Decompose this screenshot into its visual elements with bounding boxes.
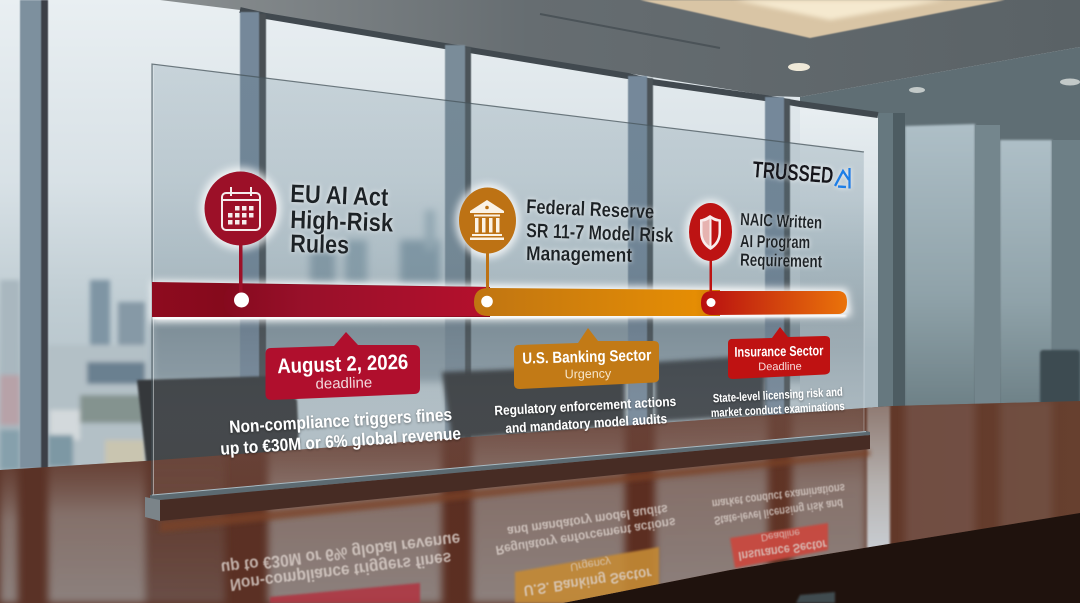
reflected text: Urgency — [569, 555, 612, 573]
description: licensing: market conduct examinations — [711, 399, 845, 420]
heading: EU AI Act High-Risk Rules: Rules — [290, 230, 350, 260]
badge: August 2, 2026 deadline — [266, 332, 420, 400]
heading: Federal Reserve SR 11-7: SR 11-7 Model Risk — [526, 220, 674, 247]
reflected text: State-level licensing risk and — [713, 496, 844, 528]
reflected badges — [270, 523, 828, 603]
badge: August 2, 2026 deadline: deadline — [315, 374, 372, 393]
badge: Insurance Sector Deadline: Insurance Sector — [734, 342, 824, 360]
heading: EU AI Act High-Risk Rules: EU AI Act — [290, 180, 389, 212]
milestone: NAIC — [686, 200, 845, 420]
icon: bank — [456, 184, 520, 290]
description: enforcement — [494, 394, 677, 436]
heading: EU AI Act High-Risk Rules — [290, 180, 394, 260]
boardroom table with reflections — [0, 395, 1080, 603]
description: licensing — [711, 385, 845, 420]
under-table shadow — [540, 505, 1080, 603]
logo: TRUSSED AI: TRUSSED — [752, 156, 834, 188]
city skyline outside the windows — [0, 210, 900, 470]
reflected text: Insurance Sector — [738, 537, 828, 564]
heading: Federal Reserve SR 11-7: Management — [526, 243, 633, 267]
description: enforcement: Regulatory enforcement actions — [494, 394, 677, 418]
heading: Federal Reserve SR 11-7 — [526, 196, 674, 267]
reflected text: U.S. Banking Sector — [523, 564, 653, 599]
badge: August 2, 2026 deadline: August 2, 2026 — [277, 351, 409, 378]
reflected text: and mandatory model audits — [506, 502, 669, 539]
glass panel — [145, 64, 870, 521]
description: fines: up to €30M or 6% global revenue — [220, 423, 462, 459]
heading: NAIC Written AI Program Requirement: AI Program — [740, 231, 810, 252]
description: enforcement: and mandatory model audits — [505, 411, 668, 436]
reflected text: up to €30M or 6% global revenue — [220, 529, 461, 578]
reflected text: Regulatory enforcement actions — [495, 515, 677, 558]
reflected text: market conduct examinations — [711, 481, 846, 511]
bright reflection under the panel base — [160, 450, 870, 532]
reflected text — [220, 481, 846, 599]
icon: calendar — [200, 168, 280, 296]
timeline bar — [152, 281, 851, 321]
heading: Federal Reserve SR 11-7: Federal Reserve — [526, 196, 655, 224]
window mullions — [20, 0, 790, 468]
description: fines: Non-compliance triggers fines — [229, 404, 453, 437]
icon: shield — [686, 200, 736, 291]
heading: EU AI Act High-Risk Rules: High-Risk — [290, 206, 394, 238]
badge: U.S. Banking Sector Urgency: U.S. Banking Sector — [522, 347, 652, 368]
heading: NAIC Written AI Program Requirement — [740, 209, 823, 271]
reflected text: Deadline — [760, 526, 801, 543]
badge: Insurance Sector Deadline: Deadline — [758, 361, 802, 373]
milestone: Federal Reserve — [456, 184, 677, 436]
badge: U.S. Banking Sector Urgency — [514, 328, 659, 389]
milestone: EU AI Act — [200, 168, 462, 459]
ceiling — [160, 0, 1080, 115]
heading: NAIC Written AI Program Requirement: NAIC Written — [740, 209, 823, 233]
reflected text: Non-compliance triggers fines — [229, 548, 452, 594]
badge: U.S. Banking Sector Urgency: Urgency — [565, 367, 612, 381]
chairs — [137, 355, 765, 470]
right glass wall — [800, 47, 1080, 410]
description: fines — [220, 404, 462, 459]
description: licensing: State-level licensing risk and — [713, 385, 843, 405]
heading: NAIC Written AI Program Requirement: Requirement — [740, 250, 822, 271]
badge: Insurance Sector Deadline — [728, 327, 830, 379]
panel base — [145, 431, 870, 521]
